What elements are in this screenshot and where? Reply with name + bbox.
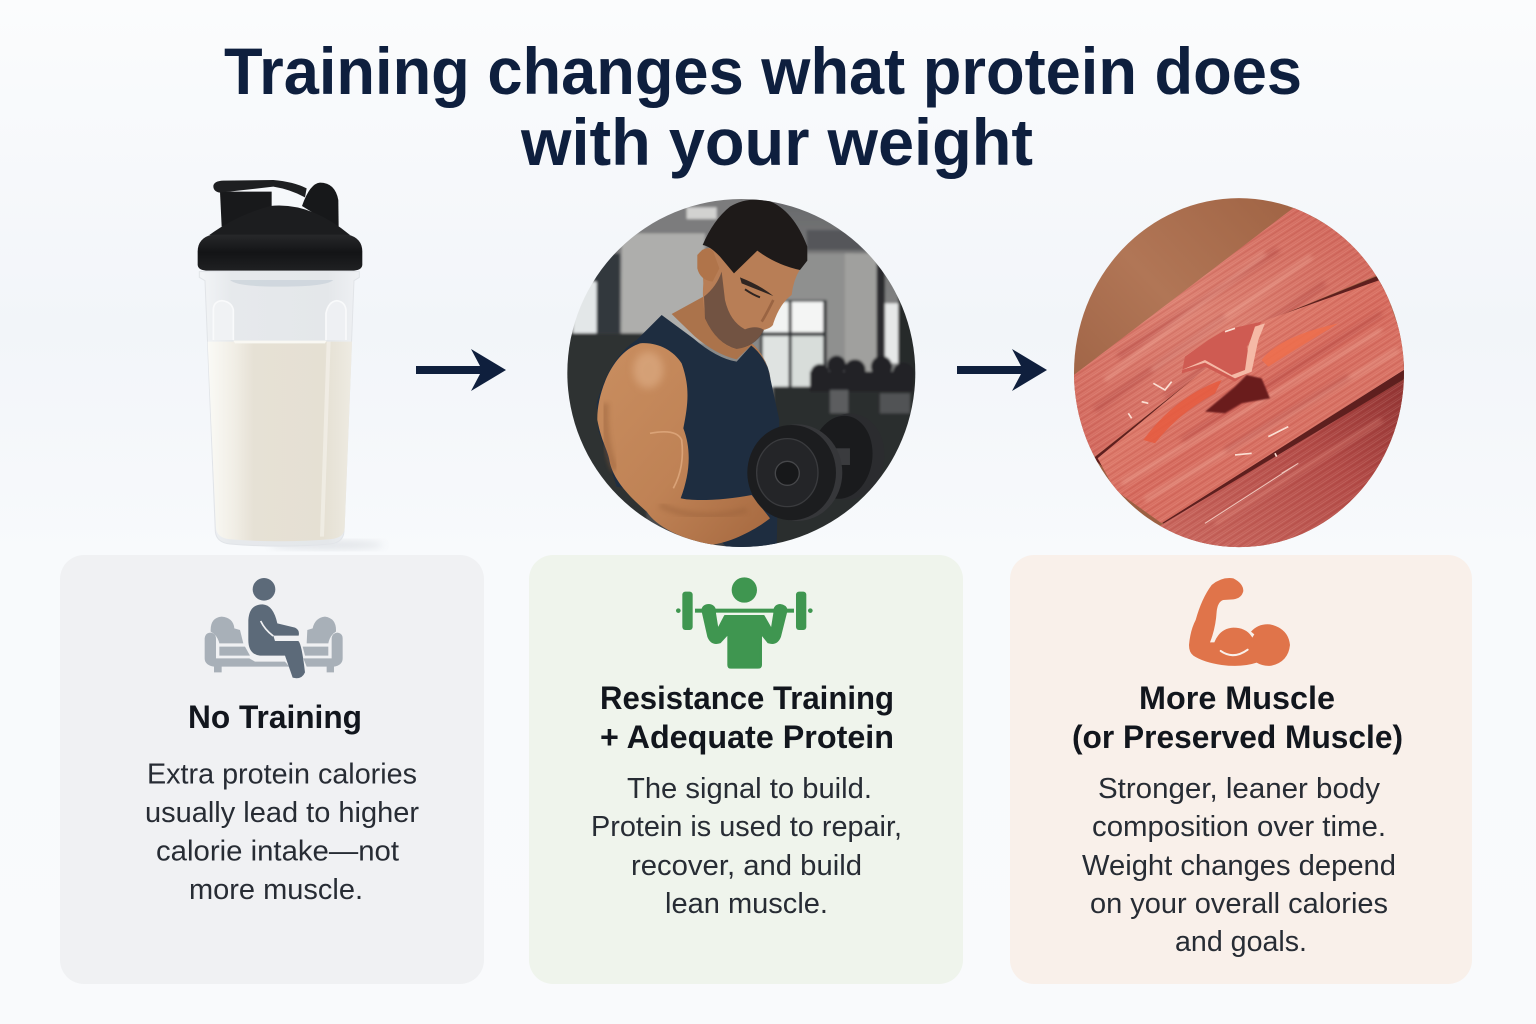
panel: no training [60, 555, 484, 984]
bottle jar [199, 272, 359, 546]
text: no training description: more muscle. [189, 874, 363, 906]
heading: no training: No Training [188, 699, 362, 735]
text: resistance training description [591, 773, 902, 920]
lower muscle bundle [1160, 380, 1404, 548]
shaker lid [220, 192, 272, 227]
text: no training description: Extra protein calories [147, 758, 417, 790]
illustration: protein shaker bottle [198, 180, 383, 549]
icon: flexed arm [1189, 578, 1290, 666]
text: more muscle description: composition over time. [1092, 811, 1386, 843]
panel: more muscle [1010, 555, 1472, 984]
icon: person lifting barbell [676, 577, 813, 668]
panel background [60, 555, 484, 984]
dark gap between bundles [1093, 275, 1408, 525]
arrow: shaker to training [416, 349, 506, 391]
tear in the muscle [1128, 322, 1288, 457]
text: no training description: calorie intake—not [156, 836, 399, 868]
arrow: training to muscle [957, 349, 1047, 391]
panel background [529, 555, 963, 984]
head [697, 200, 807, 349]
hair [703, 200, 807, 273]
heading: resistance training: Resistance Training [600, 680, 894, 716]
heading: more muscle: (or Preserved Muscle) [1072, 719, 1403, 755]
heading: more muscle [1072, 680, 1403, 755]
muscular arm [597, 343, 770, 545]
text: resistance training description: recover, and build [631, 850, 862, 882]
sleeveless navy shirt [597, 315, 779, 547]
icon: person sitting on sofa [205, 578, 343, 678]
text: more muscle description [1082, 773, 1396, 958]
upper muscle bundle [1072, 207, 1382, 457]
heading: resistance training: + Adequate Protein [600, 719, 894, 755]
text: resistance training description: The signal to build. [627, 773, 872, 805]
title: Training changes what protein does [224, 34, 1302, 108]
title: with your weight [520, 105, 1033, 179]
text: more muscle description: Weight changes depend [1082, 850, 1396, 882]
neck and collar [672, 297, 753, 359]
panel: resistance training [529, 555, 963, 984]
text: resistance training description: Protein is used to repair, [591, 811, 902, 843]
text: no training description: usually lead to higher [145, 797, 420, 829]
brown blurred background [1074, 198, 1404, 548]
bottle shadow [270, 541, 383, 549]
text: no training description [145, 758, 420, 906]
gym background [567, 199, 916, 547]
photo: muscle fibers close-up [1074, 198, 1404, 548]
heading: more muscle: More Muscle [1139, 680, 1335, 716]
title [224, 34, 1302, 179]
middle torn bundle [1098, 279, 1412, 523]
panel background [1010, 555, 1472, 984]
text: resistance training description: lean muscle. [665, 888, 828, 920]
heading: resistance training [600, 680, 894, 755]
text: more muscle description: on your overall calories [1090, 888, 1388, 920]
text: more muscle description: Stronger, leaner body [1098, 773, 1381, 805]
dumbbell [747, 414, 876, 521]
photo: man curling a dumbbell [567, 199, 916, 547]
text: more muscle description: and goals. [1175, 926, 1307, 958]
milk [208, 342, 352, 541]
